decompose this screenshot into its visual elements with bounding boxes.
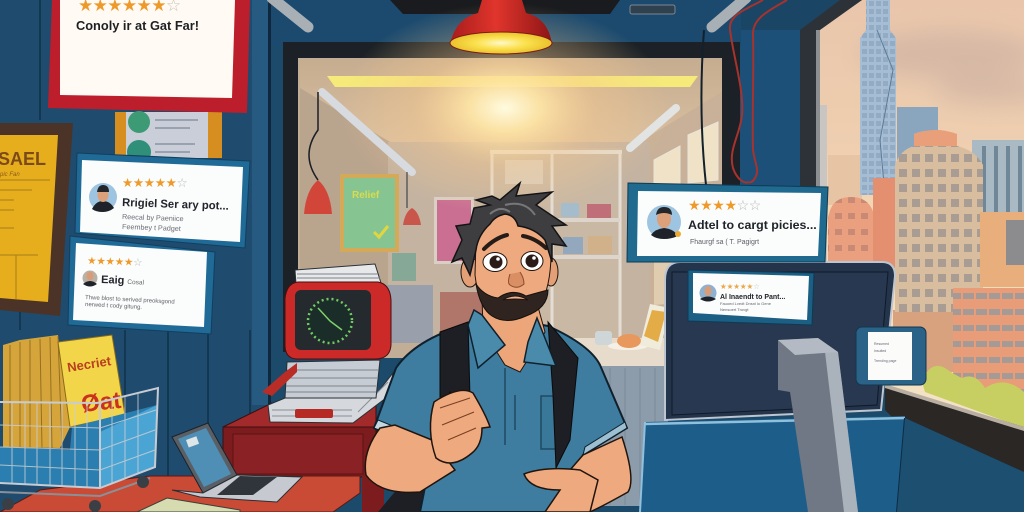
red pendant lamp, main (450, 0, 552, 54)
building: salmon dome (828, 197, 875, 262)
mouth (503, 296, 528, 300)
avatar (82, 270, 98, 286)
open hand (524, 469, 598, 512)
building: round tan tower (895, 130, 983, 312)
building: slate tower (897, 107, 938, 177)
yellow books (3, 335, 125, 448)
review card 3 (627, 183, 828, 262)
blue desk box (640, 416, 1024, 512)
far building, tan (828, 155, 862, 205)
curtain (383, 253, 433, 343)
left arm (365, 425, 455, 492)
red clock device (262, 282, 391, 396)
backpack straps (440, 322, 578, 468)
trees (922, 366, 1024, 428)
ceiling pipes (272, 0, 746, 172)
card body: Thwe blost to serived preoksgond (85, 295, 175, 306)
window with city view (818, 0, 1024, 430)
counter (555, 304, 670, 506)
left wall yellow poster (0, 123, 73, 316)
hanging red lamp, small (403, 172, 421, 225)
poster headline: Conoly ir at Gat Far! (76, 18, 199, 33)
building: right grey block (972, 140, 1024, 216)
eyebrows (484, 235, 546, 249)
card body: Fhaurgf sa ( T. Pagigrt (690, 239, 759, 246)
hanging wires (701, 0, 787, 185)
phone showing a review (856, 327, 926, 385)
green poster (340, 174, 399, 252)
review card 4 on monitor (688, 270, 814, 325)
building: lower pink block (953, 288, 1024, 405)
left wall yellow poster: pic Fan (0, 172, 20, 178)
building: blue tower (860, 0, 896, 195)
building: salmon block (873, 178, 896, 268)
red desk (0, 476, 360, 512)
review card 1 (75, 153, 250, 248)
lower paper stack (268, 373, 393, 423)
review card 2 (68, 236, 215, 334)
pink poster (434, 197, 474, 264)
wire basket with folders (0, 388, 158, 512)
review card 2: nerwed t cody gitung. (85, 302, 142, 311)
avatar (700, 284, 716, 302)
cup and pastry (595, 331, 648, 350)
review poster: red frame (48, 0, 250, 113)
review card 1: Feembey t Padget (122, 222, 181, 233)
glow from lamp (340, 3, 670, 213)
window frame and pillar (725, 0, 1024, 472)
back wall (388, 142, 650, 342)
hair (452, 183, 566, 275)
orange roof (914, 130, 957, 146)
building: right orange block (980, 212, 1024, 287)
card body: Reecal by Paeniice (122, 212, 184, 223)
hanging red lamp, left (304, 92, 332, 214)
eyes (483, 252, 543, 272)
nose (508, 272, 524, 287)
face (475, 213, 551, 319)
middle paper stack (285, 360, 380, 398)
raised fist (430, 390, 490, 463)
phone showing a review: Insulted (874, 349, 886, 353)
phone showing a review: Resumed (874, 342, 889, 346)
card heading: Eaig Cosal (101, 274, 145, 288)
shirt (374, 318, 627, 512)
ceiling (300, 60, 722, 142)
stars: ★★★★★☆ (87, 255, 143, 269)
shelves (490, 148, 622, 338)
book on desk (137, 498, 240, 512)
computer monitor back (665, 262, 895, 420)
stars: ★★★★★☆ (720, 282, 760, 291)
upper paper stack (295, 264, 381, 284)
stars: ★★★★☆☆ (688, 197, 761, 213)
avatar (647, 205, 681, 239)
review card 4 on monitor: Nensoert Trovgt (720, 307, 749, 312)
card body: Fauoed Lvedt Dnsnl lo Gene (720, 301, 772, 306)
stars: ★★★★★☆ (122, 176, 188, 190)
far building, pale (820, 105, 827, 265)
neck (482, 296, 545, 372)
backpack body (378, 450, 440, 512)
hair highlight (490, 204, 535, 215)
laptop (172, 423, 302, 502)
top beam (271, 0, 741, 46)
right side window (640, 92, 722, 338)
card heading: Adtel to cargt picies... (688, 218, 817, 232)
small cabinet (440, 292, 482, 332)
worried man (365, 183, 631, 512)
beard (476, 284, 548, 320)
avatar (89, 183, 117, 212)
back room (283, 3, 740, 358)
card heading: Rrigiel Ser ary pot... (122, 197, 229, 213)
clouds (860, 31, 1024, 104)
ears (461, 257, 558, 287)
counter tablet (640, 304, 670, 350)
right arm (560, 437, 631, 512)
collar (468, 310, 556, 368)
red cabinet (223, 403, 384, 512)
card heading: Al Inaendt to Pant... (720, 294, 785, 301)
phone showing a review: Trending page (874, 359, 896, 363)
ceiling light strip (327, 76, 698, 87)
tower diagonal line (877, 30, 893, 195)
green poster: Relief (352, 190, 380, 201)
building: lower tan block (893, 310, 958, 372)
certificate below red frame (115, 111, 222, 164)
monitor stand (778, 338, 858, 512)
book word: Øat (80, 387, 122, 418)
book title: Necriet (66, 353, 113, 375)
left side wall (300, 88, 390, 345)
